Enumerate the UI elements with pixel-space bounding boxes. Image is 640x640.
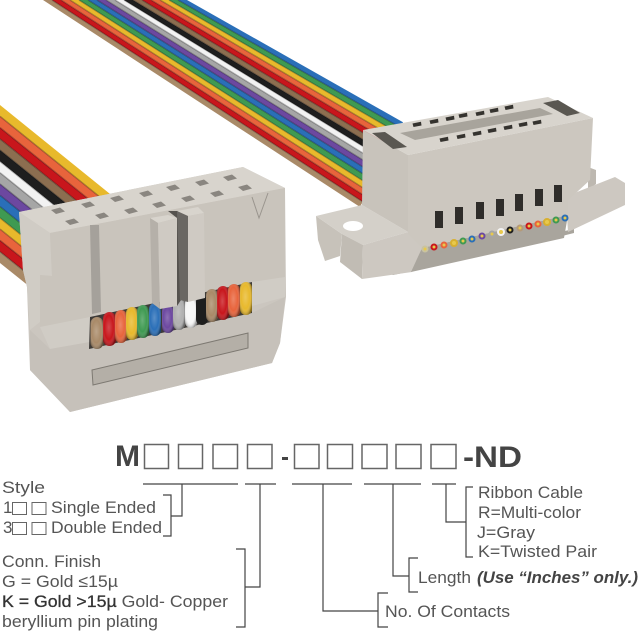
style legend: 3 — [3, 518, 12, 537]
length legend: Length — [418, 568, 471, 587]
front face — [40, 188, 285, 327]
label recess — [92, 333, 248, 385]
leader lines — [143, 484, 473, 627]
code boxes — [144, 444, 456, 468]
ribbon cable legend: K=Twisted Pair — [478, 542, 597, 561]
cable window — [89, 282, 252, 349]
contact holes — [412, 105, 542, 142]
top face — [19, 167, 285, 233]
groove — [90, 225, 101, 314]
ribbon cable legend: R=Multi-color — [478, 503, 581, 522]
block front — [362, 232, 422, 279]
small base strips — [389, 266, 413, 275]
center tabs — [150, 207, 205, 309]
connector finish legend — [2, 552, 228, 631]
ribbon cable legend — [477, 483, 597, 561]
small boxes — [12, 502, 46, 534]
holes — [51, 174, 252, 225]
triangle mark — [252, 193, 268, 218]
contacts legend: No. Of Contacts — [385, 602, 510, 621]
body side — [362, 130, 408, 232]
style legend: Single Ended — [51, 498, 156, 517]
body top — [363, 97, 593, 155]
left ribbon cable — [0, 105, 115, 311]
base strip right — [560, 229, 574, 236]
wire dots — [422, 216, 568, 252]
style legend — [2, 478, 162, 537]
left side — [19, 212, 52, 330]
cable opening — [411, 215, 568, 272]
letter M: M — [115, 440, 140, 473]
connector finish legend: K = Gold >15µ Gold- Copper — [2, 592, 228, 611]
body front — [408, 118, 593, 248]
left prong side — [316, 216, 342, 261]
right connector — [316, 97, 625, 279]
part number code — [115, 440, 522, 474]
dash — [282, 457, 288, 460]
style legend: 1 — [3, 498, 12, 517]
window slots — [435, 185, 562, 228]
connector finish legend: G = Gold ≤15µ — [2, 572, 118, 591]
connector finish legend: beryllium pin plating — [2, 612, 158, 631]
ribbon cable legend: Ribbon Cable — [478, 483, 583, 502]
connector body — [19, 167, 286, 412]
connector finish legend: Conn. Finish — [2, 552, 101, 571]
left connector — [19, 167, 286, 412]
style legend: Double Ended — [51, 518, 162, 537]
mid band — [40, 277, 285, 349]
suffix ND: -ND — [463, 441, 522, 474]
style legend: Style — [2, 478, 45, 497]
ribbon cable legend: J=Gray — [477, 523, 536, 542]
top ribbon cable — [43, 0, 403, 207]
length legend: (Use “Inches” only.) — [477, 568, 638, 587]
flange top plate — [316, 205, 408, 245]
mounting slot — [343, 221, 363, 231]
right wing — [566, 177, 625, 232]
right wing back tab — [588, 167, 596, 190]
end holes — [372, 132, 407, 149]
lower body — [30, 297, 285, 412]
center slot — [400, 108, 553, 140]
block side — [340, 234, 363, 279]
wire ends — [90, 282, 252, 349]
